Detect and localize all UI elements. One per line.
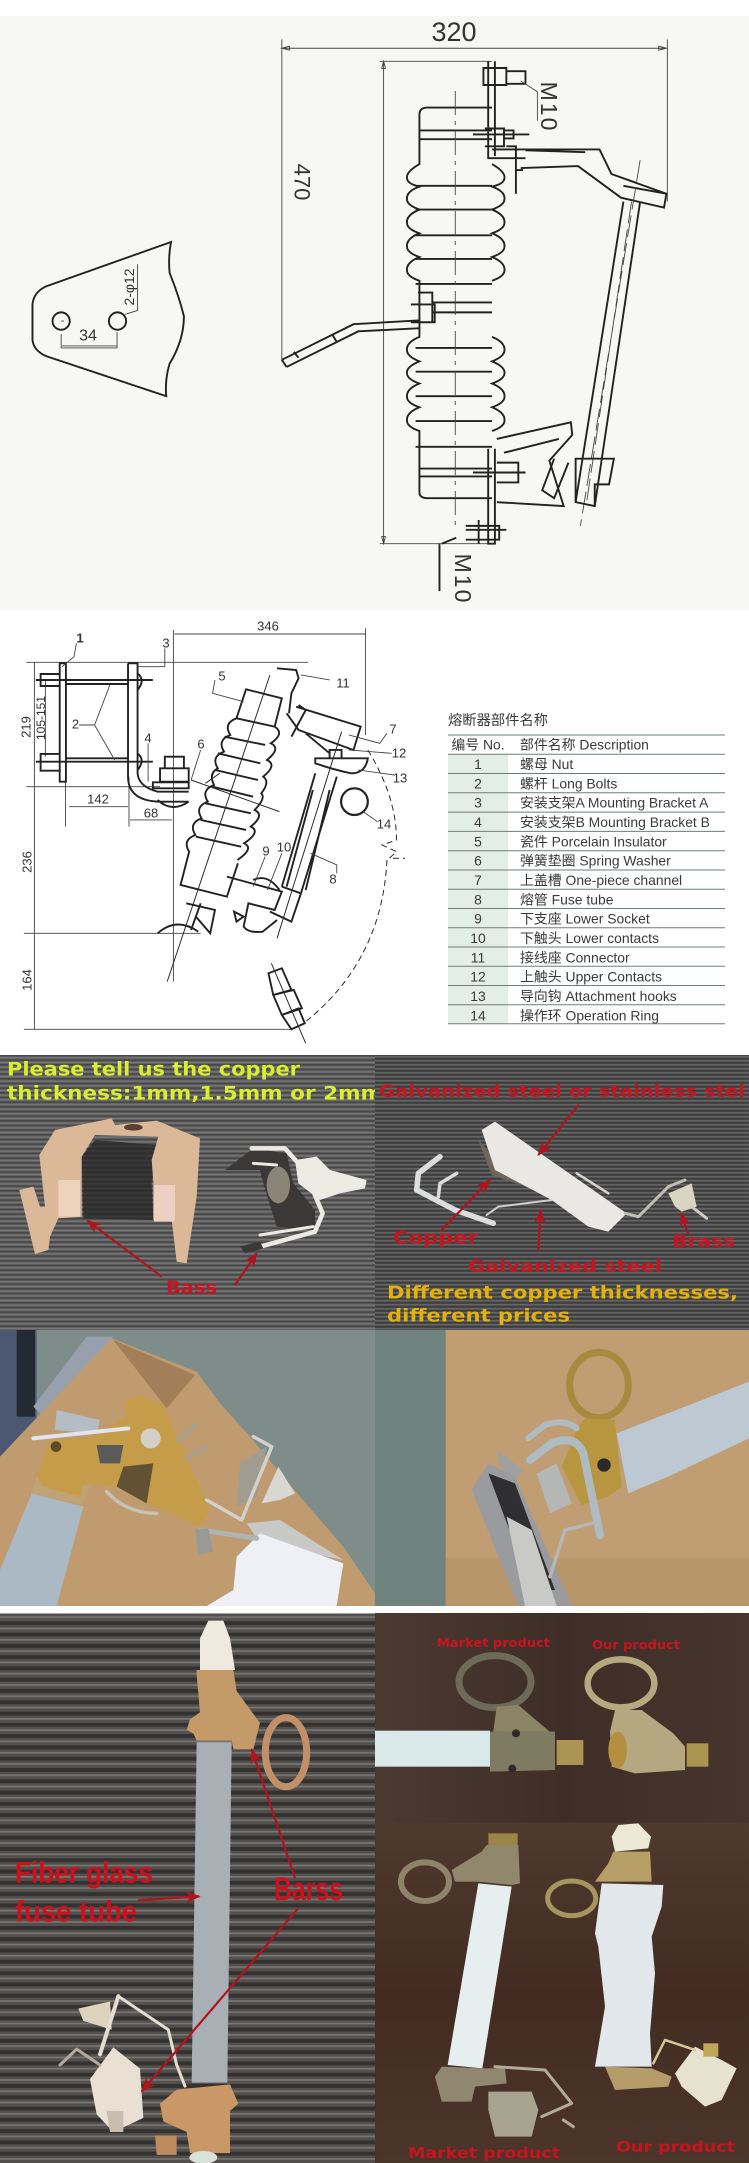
insulator — [181, 689, 282, 897]
dimension lines — [24, 628, 365, 1029]
panel: operating ring photo on cardboard — [375, 1330, 749, 1606]
label: fiber glass fuse tube: Fiber glass — [15, 1856, 153, 1890]
parts table: 螺杆 Long Bolts — [520, 775, 617, 791]
dark opening shadow — [82, 1140, 157, 1220]
callout numbers and dimensions: 7 — [389, 722, 397, 736]
dimension lines — [282, 40, 667, 544]
callout numbers and dimensions: 9 — [262, 844, 270, 858]
our wrapped tube — [595, 1883, 663, 2067]
leader lines — [62, 643, 394, 890]
market tube — [375, 1731, 490, 1767]
label: M10 bottom: M10 — [450, 554, 476, 604]
cardboard — [0, 1338, 375, 1606]
label: fiber glass fuse tube — [15, 1856, 153, 1928]
parts table: 12 — [470, 969, 486, 985]
leader lines — [521, 81, 537, 121]
operation ring — [341, 788, 368, 815]
parts table: 上盖槽 One-piece channel — [520, 872, 682, 888]
mounting plate detail — [32, 242, 184, 396]
label: market product: Market product — [408, 2144, 561, 2162]
bracket with porcelain — [225, 1148, 315, 1230]
chrome plate — [497, 1450, 523, 1480]
mounting arm — [282, 293, 435, 367]
dimension: 34: 34 — [79, 328, 97, 344]
panel: complete fuse tube comparison photo — [375, 1823, 749, 2163]
upper contact assembly — [277, 668, 368, 773]
red arrows — [87, 1221, 162, 1277]
parts table: 下触头 Lower contacts — [520, 930, 659, 946]
knurled knob — [537, 1463, 572, 1513]
tan copper contact — [19, 1118, 200, 1263]
parts table: 7 — [474, 872, 482, 888]
market tube — [448, 1883, 512, 2068]
parts table: 8 — [474, 891, 482, 907]
panel: fiber glass fuse tube photo — [0, 1614, 375, 2163]
callout numbers and dimensions: 8 — [329, 872, 337, 886]
red arrows — [538, 1105, 578, 1155]
callout numbers and dimensions — [18, 618, 407, 991]
label: our product: Our product — [616, 2138, 736, 2156]
callout numbers and dimensions: 105-151 — [34, 696, 48, 740]
white tube end — [200, 1621, 235, 1670]
hooks — [528, 1422, 577, 1438]
insulator axis — [167, 675, 279, 982]
label: our product: Our product — [592, 1638, 680, 1652]
parts table: 4 — [474, 814, 482, 830]
parts table — [448, 735, 725, 1024]
dimension: 320: 320 — [431, 17, 477, 47]
label: brass: Brass — [672, 1232, 735, 1252]
brass head — [562, 1418, 622, 1505]
dashed swing arc — [306, 750, 405, 1022]
panel: side view technical drawing — [0, 16, 749, 610]
parts table: 螺母 Nut — [520, 756, 573, 772]
parts table: 熔管 Fuse tube — [520, 891, 614, 907]
panel: upper contact photo on cardboard — [0, 1330, 375, 1606]
panel: steel and copper parts photo — [375, 1055, 749, 1332]
callout numbers and dimensions: 346 — [257, 618, 279, 634]
market head — [488, 1833, 518, 1845]
price note: Different copper thicknesses, — [387, 1282, 738, 1304]
top bracket and bolts — [473, 61, 666, 208]
ring — [570, 1352, 628, 1418]
market base — [435, 2067, 507, 2102]
lower contact assembly — [158, 877, 282, 933]
top brass ferrule — [187, 1670, 260, 1749]
red arrows — [252, 1749, 295, 1878]
parts table: 安装支架B Mounting Bracket B — [520, 814, 710, 830]
yellow note — [7, 1060, 383, 1104]
parts table: 编号 No. — [451, 737, 505, 753]
fuse tube — [576, 186, 666, 506]
parts table: 上触头 Upper Contacts — [520, 969, 662, 985]
callout numbers and dimensions: 68 — [144, 806, 158, 820]
our base — [605, 2067, 672, 2090]
dimension: 470: 470 — [290, 164, 314, 200]
bottom contact — [439, 422, 614, 591]
callout numbers and dimensions: 142 — [87, 792, 109, 806]
insulator centre line — [454, 91, 456, 526]
fuse tube — [0, 1493, 83, 1606]
panel: ring head comparison photo — [375, 1613, 749, 1823]
parts table: 9 — [474, 911, 482, 927]
parts table: 10 — [470, 930, 486, 946]
label: brass: Bass — [166, 1278, 217, 1298]
label: galvanized steel: Galvanized steel — [468, 1257, 662, 1277]
parts table: 13 — [470, 988, 486, 1004]
insulator — [247, 1520, 343, 1560]
parts table: 安装支架A Mounting Bracket A — [520, 795, 709, 811]
callout numbers and dimensions: 10 — [277, 840, 291, 854]
callout numbers and dimensions: 164 — [20, 969, 34, 991]
fuse tube — [192, 1742, 232, 2083]
callout numbers and dimensions: 14 — [377, 816, 391, 832]
panel: copper parts photo — [0, 1055, 383, 1332]
parts table: 操作环 Operation Ring — [520, 1007, 659, 1023]
label: brass: Barss — [274, 1871, 343, 1907]
parts table: 下支座 Lower Socket — [520, 911, 650, 927]
callout numbers and dimensions: 2 — [72, 716, 79, 732]
dimension: hole size: 2-φ12 — [121, 268, 137, 306]
callout numbers and dimensions: 6 — [197, 736, 205, 752]
label: M10 top: M10 — [536, 82, 562, 132]
callout numbers and dimensions: 219 — [18, 716, 34, 738]
insulator body — [407, 108, 505, 498]
porcelain and contact — [90, 2047, 143, 2132]
label: market product: Market product — [437, 1636, 550, 1650]
callout numbers and dimensions: 5 — [218, 668, 226, 684]
mounting brackets and bolts — [36, 663, 189, 807]
parts table: 14 — [470, 1007, 486, 1023]
price note — [387, 1282, 738, 1326]
panel: front view technical drawing — [0, 610, 749, 1055]
white separator band — [0, 1606, 749, 1613]
parts table: 瓷件 Porcelain Insulator — [520, 833, 667, 849]
label: galvanized or stainless: Galvanized steel or stainless stel — [379, 1082, 745, 1102]
label: fiber glass fuse tube: fuse tube — [15, 1896, 137, 1928]
parts table: 11 — [471, 949, 485, 965]
white contact assembly — [478, 1138, 535, 1190]
callout numbers and dimensions: 236 — [20, 851, 34, 873]
parts table: 6 — [474, 853, 482, 869]
market head — [459, 1656, 531, 1708]
callout numbers and dimensions: 4 — [144, 730, 152, 746]
price note: different prices — [387, 1306, 570, 1326]
parts table: 部件名称 Description — [520, 737, 649, 753]
callout numbers and dimensions: 3 — [162, 636, 170, 650]
callout numbers and dimensions: 12 — [392, 746, 406, 760]
fuse tube — [270, 773, 337, 922]
callout numbers and dimensions: 11 — [336, 676, 350, 690]
table title: 熔断器部件名称 — [448, 712, 548, 729]
label: copper: Copper — [393, 1228, 478, 1248]
yellow note: thickness:1mm,1.5mm or 2mm — [7, 1084, 383, 1104]
ring — [265, 1718, 307, 1787]
callout numbers and dimensions: 1 — [76, 630, 84, 646]
our head — [588, 1659, 654, 1707]
our head — [595, 1852, 652, 1882]
callout numbers and dimensions: 13 — [393, 770, 407, 786]
parts table: 2 — [474, 775, 482, 791]
parts table: 导向钩 Attachment hooks — [520, 988, 677, 1004]
brass contact — [37, 1395, 210, 1527]
dropped fuse — [268, 968, 305, 1029]
parts table: 弹簧垫圈 Spring Washer — [520, 853, 671, 869]
wrapped tube — [617, 1382, 749, 1493]
parts table: 5 — [474, 833, 482, 849]
parts table: 接线座 Connector — [520, 949, 630, 965]
bottom brass socket — [160, 2084, 238, 2153]
parts table: 3 — [474, 795, 482, 811]
yellow note: Please tell us the copper — [7, 1060, 301, 1080]
steel bracket — [237, 1447, 267, 1507]
parts table: 1 — [474, 756, 482, 772]
